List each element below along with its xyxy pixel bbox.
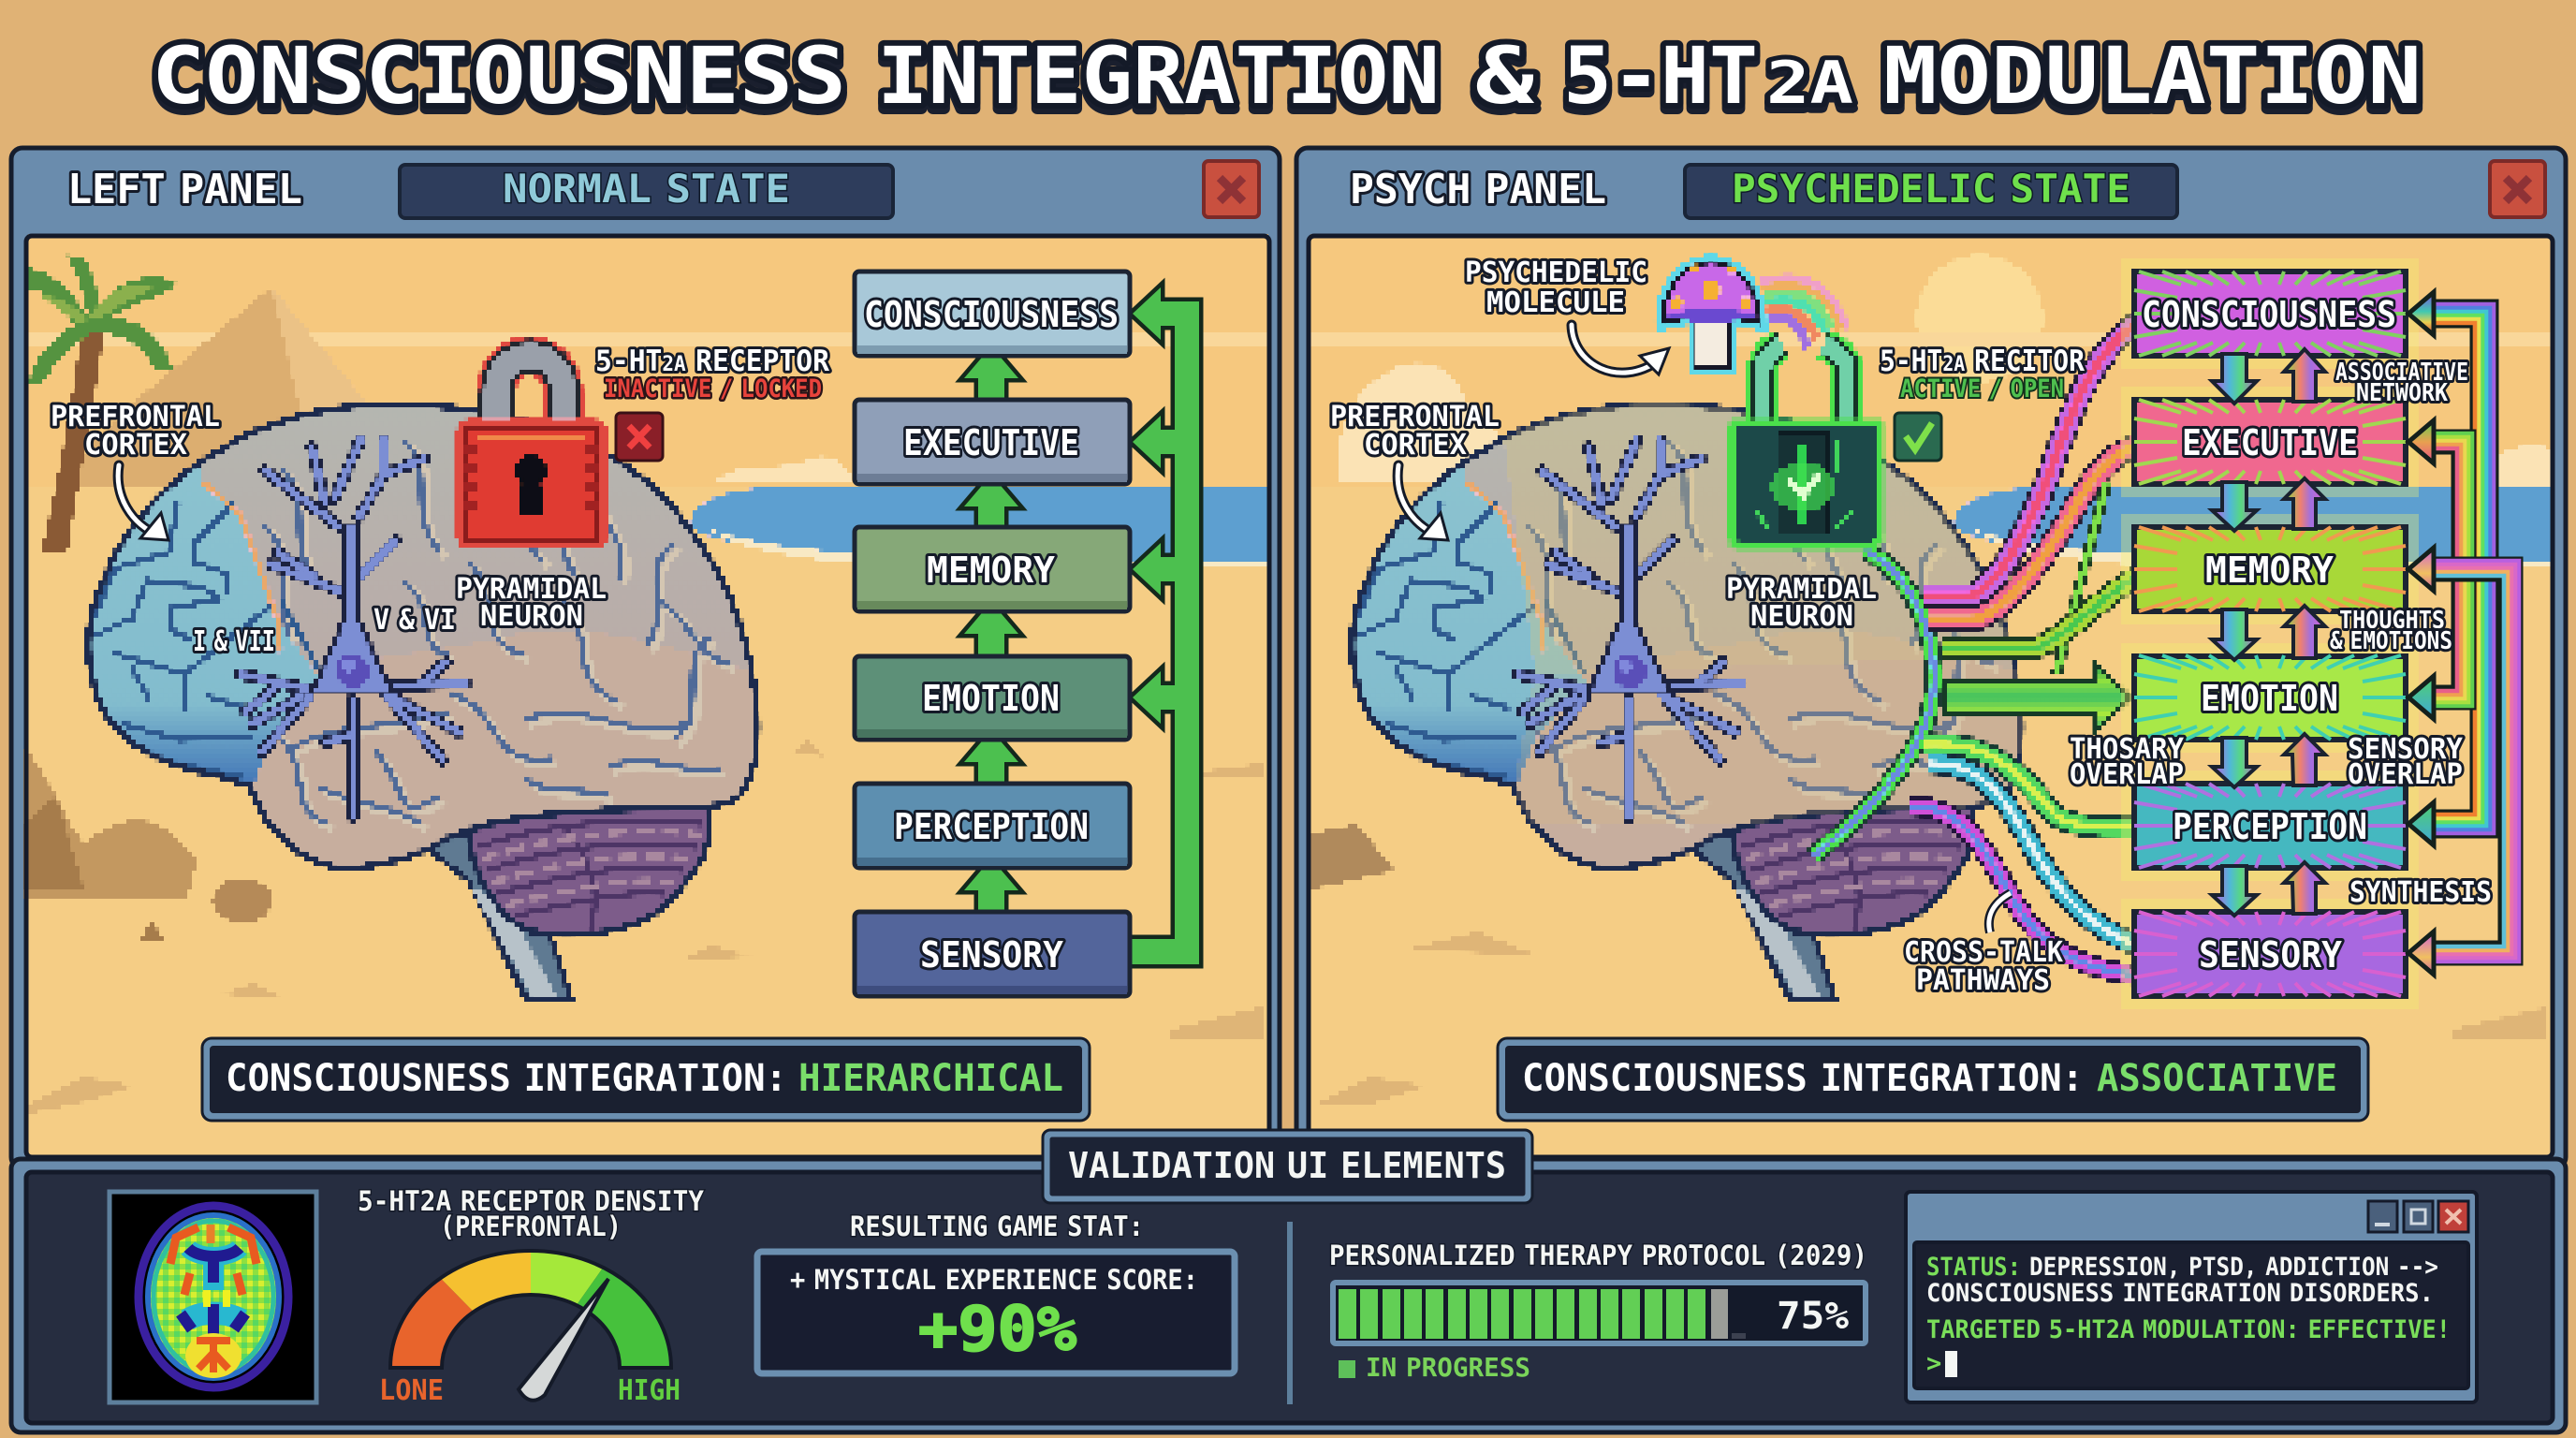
box: perception: PERCEPTION [2173,806,2367,847]
right-side loop connectors [2408,292,2519,975]
callouts on arrows [2070,359,2492,909]
callouts on arrows: ASSOCIATIVE [2335,359,2468,387]
therapy progress [1329,1240,1867,1383]
cross-talk label: PATHWAYS [1916,964,2050,997]
receptor label [595,345,829,404]
layer labels [193,573,607,658]
title bar: LEFT PANEL [67,166,302,213]
box: memory [2134,527,2406,611]
inner frame [1309,236,2553,1157]
box: sensory: SENSORY [920,934,1063,976]
game stat: + MYSTICAL EXPERIENCE SCORE: [790,1264,1198,1296]
title bar [67,161,1259,218]
box: sensory: SENSORY [2199,934,2342,976]
cross-talk pathways [1814,323,2139,976]
prefrontal cortex label: CORTEX [1364,429,1467,462]
box: perception [855,784,1130,868]
box: executive [855,400,1130,484]
game stat: RESULTING GAME STAT: [850,1211,1144,1242]
psychedelic molecule label: PSYCHEDELIC [1465,257,1647,289]
status bar: hierarchical: HIERARCHICAL [798,1057,1063,1100]
box: emotion [2134,655,2406,740]
title bar [1350,161,2545,218]
inner frame [26,236,1269,1157]
box: emotion [855,656,1130,740]
prefrontal cortex label: PREFRONTAL [1330,401,1500,433]
icon: red padlock [460,356,604,546]
psychedelic stack [2134,271,2406,996]
gauge: (PREFRONTAL) [440,1211,622,1242]
brain scan [110,1192,316,1402]
cross-talk label [1904,893,2063,997]
callouts on arrows: THOUGHTS [2339,607,2445,635]
terminal window: TARGETED 5-HT2A MODULATION: EFFECTIVE! [1926,1315,2451,1344]
status bar: associative: ASSOCIATIVE [2097,1057,2337,1100]
callouts on arrows: SYNTHESIS [2349,876,2492,909]
prefrontal cortex label: CORTEX [84,429,187,462]
layer labels: V & VI [373,604,456,637]
terminal window [1906,1192,2477,1402]
validation tab: VALIDATION UI ELEMENTS [1068,1145,1506,1186]
box: memory [855,527,1130,611]
panel: left, normal state [11,148,1280,1168]
therapy progress: PERSONALIZED THERAPY PROTOCOL (2029) [1329,1240,1867,1271]
gauge: LONE [379,1374,444,1407]
box: executive [2134,400,2406,484]
panel: validation ui [11,1130,2566,1432]
title: 2A [1766,49,1853,117]
game stat: +90% [918,1293,1076,1365]
box: consciousness [2134,271,2406,356]
cross-talk label: CROSS-TALK [1904,936,2063,969]
callouts on arrows: & EMOTIONS [2330,627,2452,655]
box: emotion: EMOTION [922,678,1060,719]
terminal window: STATUS: [1926,1253,2021,1282]
psychedelic molecule label: MOLECULE [1486,286,1625,319]
title: 5-HT [1563,30,1758,122]
receptor label: 5-HT2A RECITOR [1880,345,2085,378]
receptor label: 5-HT2A RECEPTOR [595,345,829,378]
box: memory: MEMORY [2205,550,2334,591]
layer labels: NEURON [480,600,583,633]
title bar: NORMAL STATE [503,166,790,212]
title bar: PSYCH PANEL [1350,166,1606,213]
scene: left desert background [24,236,1269,1157]
box: sensory [855,912,1130,996]
callouts on arrows: OVERLAP [2070,758,2184,791]
callouts on arrows: THOSARY [2070,733,2184,766]
layer labels: I & VII [193,625,275,658]
box: sensory [2134,912,2406,996]
title: CONSCIOUSNESS [152,30,846,122]
pyramidal neuron label: NEURON [1750,600,1853,633]
title: MODULATION [1883,30,2422,122]
status bar: hierarchical: CONSCIOUSNESS INTEGRATION: [226,1057,787,1100]
box: executive: EXECUTIVE [903,422,1079,463]
psychedelic molecule label [1465,257,1647,319]
layer labels: PYRAMIDAL [456,573,607,606]
box: consciousness: CONSCIOUSNESS [864,294,1119,335]
box: executive: EXECUTIVE [2182,422,2358,463]
box: consciousness: CONSCIOUSNESS [2142,294,2396,335]
title [152,30,2422,122]
icon: psychedelic mushroom [1662,262,1847,367]
receptor label [1880,345,2085,404]
arrows: green feedback [964,287,1199,964]
title: INTEGRATION [877,30,1440,122]
gauge [358,1185,705,1407]
therapy progress: IN PROGRESS [1366,1352,1530,1383]
title: & [1475,30,1535,122]
arrow: molecule pointer [1572,325,1669,374]
prefrontal cortex label [1330,401,1500,462]
arrow: prefrontal pointer [118,465,168,540]
box: perception [2134,784,2406,868]
box: perception: PERCEPTION [894,806,1089,847]
scene: right desert background [1309,236,2553,1157]
icon: red x badge [616,413,663,461]
gauge: HIGH [618,1374,681,1407]
double arrows between stack levels [2212,349,2325,916]
prefrontal cortex label: PREFRONTAL [51,401,220,433]
hierarchy stack [855,271,1199,996]
pyramidal neuron label: PYRAMIDAL [1726,573,1877,606]
status bar: hierarchical [202,1038,1090,1121]
icon: open green padlock [1732,345,1879,544]
icon: green check badge [1895,413,1941,461]
divider [1287,1222,1293,1404]
callouts on arrows: NETWORK [2356,379,2448,407]
title bar: PSYCHEDELIC STATE [1732,166,2130,212]
terminal window: DEPRESSION, PTSD, ADDICTION --> [2029,1253,2438,1282]
terminal window: CONSCIOUSNESS INTEGRATION DISORDERS. [1926,1279,2434,1308]
validation tab [1043,1130,1532,1203]
panel: right, psychedelic state [1296,148,2566,1168]
receptor label: INACTIVE / LOCKED [604,374,822,404]
box: consciousness [855,271,1130,356]
game stat [757,1211,1235,1373]
therapy progress: 75% [1777,1295,1849,1338]
status bar: associative [1498,1038,2368,1121]
prefrontal cortex label [51,401,220,462]
box: emotion: EMOTION [2201,678,2338,719]
receptor label: ACTIVE / OPEN [1900,374,2064,404]
callouts on arrows: SENSORY [2348,733,2463,766]
status bar: associative: CONSCIOUSNESS INTEGRATION: [1522,1057,2084,1100]
terminal window: > [1926,1349,1941,1378]
gauge: 5-HT2A RECEPTOR DENSITY [358,1185,705,1217]
callouts on arrows: OVERLAP [2348,758,2463,791]
pyramidal neuron label [1726,573,1877,633]
arrow: prefrontal pointer [1398,465,1448,540]
box: memory: MEMORY [927,550,1055,591]
